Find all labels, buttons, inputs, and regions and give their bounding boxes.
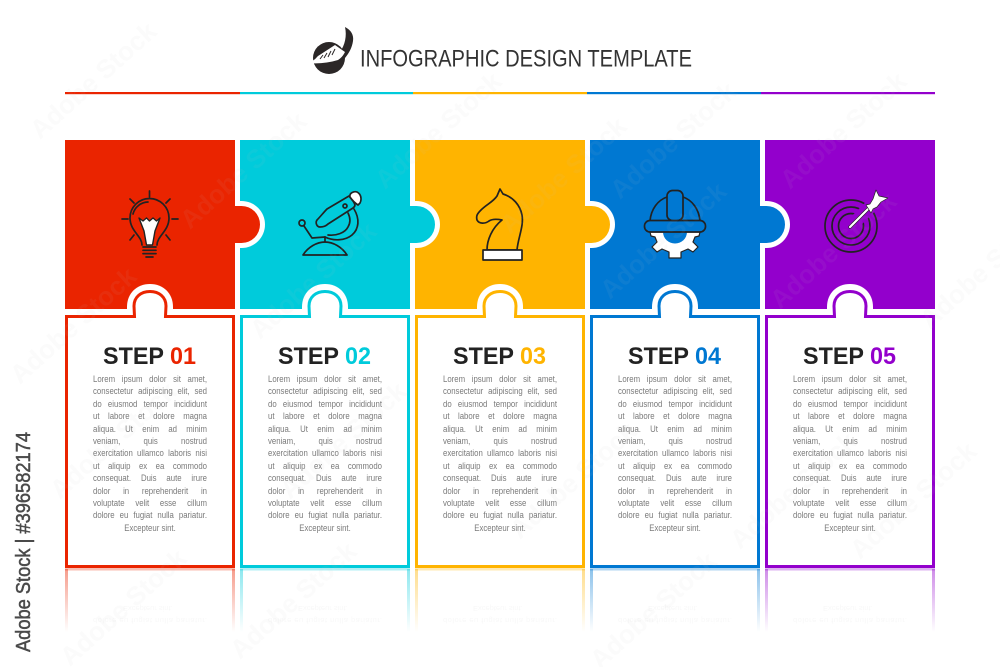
reflection: dolore eu fugiat nulla pariatur. <box>793 616 907 625</box>
body text: Excepteur sint. <box>824 523 876 533</box>
body text: Lorem ipsum dolor sit amet, <box>618 374 732 384</box>
body text: dolore eu fugiat nulla pariatur. <box>443 510 557 520</box>
body text: ut labore et dolore magna <box>268 411 382 421</box>
body text: dolor in reprehenderit in <box>268 486 382 496</box>
panel: step 01 <box>65 140 265 632</box>
connector tab <box>585 201 615 248</box>
reflection <box>765 568 935 632</box>
stock watermark: Adobe Stock <box>504 415 643 544</box>
body text: aliqua. Ut enim ad minim <box>793 424 907 434</box>
title: INFOGRAPHIC DESIGN TEMPLATE <box>360 46 692 72</box>
connector tab <box>760 201 790 248</box>
body text: ut labore et dolore magna <box>618 411 732 421</box>
body text: Lorem ipsum dolor sit amet, <box>93 374 207 384</box>
puzzle notch <box>127 284 173 309</box>
icon panel <box>765 140 935 309</box>
body text: exercitation ullamco laboris nisi <box>618 448 732 458</box>
body text <box>268 373 384 538</box>
body text: do eiusmod tempor incididunt <box>618 399 732 409</box>
body text: Excepteur sint. <box>299 523 351 533</box>
icon panel <box>415 140 585 309</box>
icon: helmet with gear <box>644 190 706 258</box>
body text: consectetur adipiscing elit, sed <box>93 386 207 396</box>
body text: consequat. Duis aute irure <box>793 473 907 483</box>
stock watermark: Adobe Stock <box>44 375 183 504</box>
panel: step 03 <box>415 140 615 632</box>
body text: consequat. Duis aute irure <box>443 473 557 483</box>
body text: ut labore et dolore magna <box>93 411 207 421</box>
body text: voluptate velit esse cillum <box>93 498 207 508</box>
stock id side label: Adobe Stock | #396582174 <box>13 432 35 652</box>
stock watermark: Adobe Stock <box>764 185 903 314</box>
stock watermark: Adobe Stock <box>494 110 633 239</box>
body text: voluptate velit esse cillum <box>443 498 557 508</box>
reflection <box>415 568 585 632</box>
reflection: Excepteur sint. <box>823 604 873 613</box>
text card <box>766 292 934 566</box>
body text: ut aliquip ex ea commodo <box>443 461 557 471</box>
stock watermark: Adobe Stock <box>4 260 143 389</box>
body text: consectetur adipiscing elit, sed <box>793 386 907 396</box>
body text: voluptate velit esse cillum <box>268 498 382 508</box>
text card <box>416 292 584 566</box>
stock watermark: Adobe Stock <box>844 435 983 564</box>
body text: consequat. Duis aute irure <box>268 473 382 483</box>
body text: veniam, quis nostrud <box>618 436 732 446</box>
reflection: Excepteur sint. <box>473 604 523 613</box>
body text: ut aliquip ex ea commodo <box>618 461 732 471</box>
body text <box>93 373 209 538</box>
stock watermark: Adobe Stock <box>174 105 313 234</box>
body text: consequat. Duis aute irure <box>618 473 732 483</box>
reflection: dolore eu fugiat nulla pariatur. <box>618 616 732 625</box>
icon: target with dart <box>825 190 888 252</box>
panel: step 02 <box>240 140 440 632</box>
body text: voluptate velit esse cillum <box>793 498 907 508</box>
body text: consectetur adipiscing elit, sed <box>268 386 382 396</box>
panel: step 05 <box>765 140 935 632</box>
icon panel <box>590 140 760 309</box>
panel: step 04 <box>590 140 790 632</box>
logo icon <box>308 27 353 74</box>
body text: Excepteur sint. <box>474 523 526 533</box>
stock watermark: Adobe Stock <box>594 175 733 304</box>
step heading: STEP 02 <box>278 343 371 370</box>
body text: voluptate velit esse cillum <box>618 498 732 508</box>
reflection: Excepteur sint. <box>298 604 348 613</box>
body text: consectetur adipiscing elit, sed <box>443 386 557 396</box>
body text: veniam, quis nostrud <box>268 436 382 446</box>
body text <box>618 373 734 538</box>
icon: light bulb <box>122 191 178 257</box>
body text: dolore eu fugiat nulla pariatur. <box>618 510 732 520</box>
body text: aliqua. Ut enim ad minim <box>443 424 557 434</box>
body text: ut aliquip ex ea commodo <box>268 461 382 471</box>
body text: ut labore et dolore magna <box>793 411 907 421</box>
body text: exercitation ullamco laboris nisi <box>443 448 557 458</box>
stock watermark: Adobe Stock <box>24 15 163 144</box>
body text: exercitation ullamco laboris nisi <box>268 448 382 458</box>
body text: exercitation ullamco laboris nisi <box>793 448 907 458</box>
body text: dolore eu fugiat nulla pariatur. <box>93 510 207 520</box>
reflection <box>590 568 760 632</box>
icon: chess knight <box>477 189 522 260</box>
icon panel <box>240 140 410 309</box>
stock watermark: Adobe Stock <box>774 65 913 194</box>
stock watermark: Adobe Stock <box>224 535 363 664</box>
body text: do eiusmod tempor incididunt <box>268 399 382 409</box>
body text: veniam, quis nostrud <box>793 436 907 446</box>
body text: exercitation ullamco laboris nisi <box>93 448 207 458</box>
step heading: STEP 03 <box>453 343 546 370</box>
body text: Excepteur sint. <box>649 523 701 533</box>
puzzle notch <box>477 284 523 309</box>
body text: dolor in reprehenderit in <box>93 486 207 496</box>
connector tab <box>235 201 265 248</box>
icon: microscope <box>299 192 361 255</box>
reflection <box>65 568 235 632</box>
body text: ut labore et dolore magna <box>443 411 557 421</box>
body text: aliqua. Ut enim ad minim <box>618 424 732 434</box>
reflection: dolore eu fugiat nulla pariatur. <box>268 616 382 625</box>
body text <box>793 373 909 538</box>
text card <box>592 292 758 566</box>
reflection: dolore eu fugiat nulla pariatur. <box>93 616 207 625</box>
reflection <box>240 568 410 632</box>
body text: consectetur adipiscing elit, sed <box>618 386 732 396</box>
puzzle notch <box>827 284 873 309</box>
body text: aliqua. Ut enim ad minim <box>268 424 382 434</box>
body text <box>443 373 559 538</box>
text card <box>66 292 234 566</box>
icon panel <box>65 140 235 309</box>
body text: do eiusmod tempor incididunt <box>93 399 207 409</box>
body text: veniam, quis nostrud <box>93 436 207 446</box>
body text: Lorem ipsum dolor sit amet, <box>268 374 382 384</box>
body text: ut aliquip ex ea commodo <box>93 461 207 471</box>
body text: dolor in reprehenderit in <box>443 486 557 496</box>
body text: dolore eu fugiat nulla pariatur. <box>268 510 382 520</box>
reflection: Excepteur sint. <box>648 604 698 613</box>
body text: Lorem ipsum dolor sit amet, <box>793 374 907 384</box>
body text: dolor in reprehenderit in <box>793 486 907 496</box>
reflection: Excepteur sint. <box>123 604 173 613</box>
stock watermark: Adobe Stock <box>274 375 413 504</box>
body text: veniam, quis nostrud <box>443 436 557 446</box>
text card <box>242 292 408 566</box>
stock watermark: Adobe Stock <box>604 75 743 204</box>
body text: do eiusmod tempor incididunt <box>443 399 557 409</box>
header colour rule <box>65 92 935 94</box>
stock watermark: Adobe Stock <box>724 425 863 554</box>
body text: ut aliquip ex ea commodo <box>793 461 907 471</box>
body text: do eiusmod tempor incididunt <box>793 399 907 409</box>
body text: consequat. Duis aute irure <box>93 473 207 483</box>
puzzle notch <box>652 284 698 309</box>
stock watermark: Adobe Stock <box>369 65 508 194</box>
body text: dolore eu fugiat nulla pariatur. <box>793 510 907 520</box>
reflection: dolore eu fugiat nulla pariatur. <box>443 616 557 625</box>
puzzle notch <box>302 284 348 309</box>
body text: dolor in reprehenderit in <box>618 486 732 496</box>
body text: Lorem ipsum dolor sit amet, <box>443 374 557 384</box>
connector tab <box>410 201 440 248</box>
body text: Excepteur sint. <box>124 523 176 533</box>
step heading: STEP 05 <box>803 343 896 370</box>
step heading: STEP 01 <box>103 343 196 370</box>
body text: aliqua. Ut enim ad minim <box>93 424 207 434</box>
stock watermark: Adobe Stock <box>244 215 383 344</box>
step heading: STEP 04 <box>628 343 722 370</box>
